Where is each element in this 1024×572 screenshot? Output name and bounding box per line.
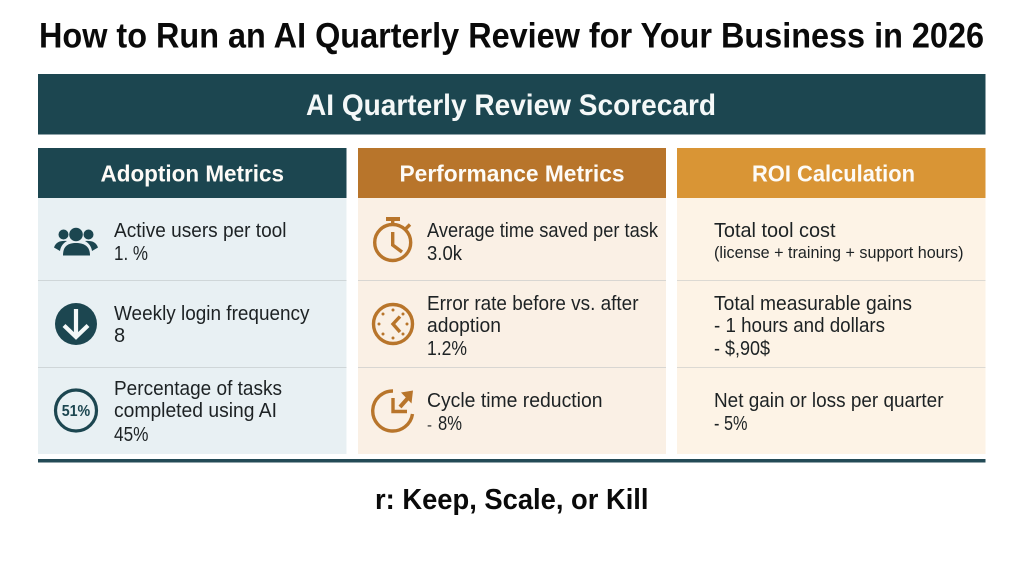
heading: roi calculation: ROI Calculation: [752, 160, 915, 186]
heading: performance metrics: [358, 148, 666, 198]
text: login frequency: [114, 303, 310, 347]
text: active users: Active users per tool: [114, 220, 286, 242]
text: cycle time: Cycle time reduction: [427, 390, 602, 412]
text: measurable gains: - $,90$: [714, 338, 770, 360]
text: cycle time: -: [427, 417, 432, 434]
text: total tool cost: [714, 220, 964, 262]
icon: users: [54, 228, 98, 256]
text: measurable gains: [714, 293, 912, 360]
text: error rate: Error rate before vs. after: [427, 293, 639, 315]
text: time saved: [427, 220, 659, 265]
panel: performance metrics: [358, 148, 666, 454]
text: net gain or loss: Net gain or loss per quarter: [714, 390, 944, 412]
banner: scorecard heading: [38, 74, 986, 134]
text: measurable gains: Total measurable gains: [714, 293, 912, 315]
text: net gain or loss: - 5%: [714, 413, 748, 435]
text: active users: 1. %: [114, 243, 148, 265]
text: tasks using ai: [114, 378, 282, 446]
panel: roi calculation: [677, 148, 986, 454]
text: error rate: [427, 293, 639, 360]
heading: adoption metrics: Adoption Metrics: [100, 160, 284, 186]
text: login frequency: 8: [114, 325, 125, 347]
text: measurable gains: - 1 hours and dollars: [714, 315, 885, 337]
text: cycle time: [427, 390, 602, 435]
text: login frequency: Weekly login frequency: [114, 303, 310, 325]
text: cycle time: 8%: [438, 413, 462, 435]
banner: scorecard heading: AI Quarterly Review Scorecard: [306, 89, 716, 122]
icon: clock: [374, 304, 412, 344]
text: error rate: adoption: [427, 315, 501, 337]
text: tasks using ai: 45%: [114, 424, 149, 446]
icon: stopwatch: [375, 219, 411, 260]
panel: adoption metrics: [38, 148, 346, 454]
text: time saved: 3.0k: [427, 243, 463, 265]
text: total tool cost: (license + training + support hours): [714, 243, 964, 262]
text: tasks using ai: completed using AI: [114, 400, 277, 422]
footer heading: r: Keep, Scale, or Kill: [375, 484, 648, 516]
text: time saved: Average time saved per task: [427, 220, 659, 242]
icon: down arrow circle: [55, 303, 97, 345]
heading: roi calculation: [677, 148, 986, 198]
icon: percent ring: [56, 390, 96, 431]
text: net gain or loss: [714, 390, 944, 435]
text: error rate: 1.2%: [427, 338, 467, 360]
icon: cycle time: [373, 390, 413, 431]
heading: performance metrics: Performance Metrics: [400, 160, 624, 186]
heading: adoption metrics: [38, 148, 346, 198]
text: active users: [114, 220, 286, 265]
text: tasks using ai: Percentage of tasks: [114, 378, 282, 400]
icon: percent ring: 51%: [62, 403, 90, 420]
text: total tool cost: Total tool cost: [714, 220, 836, 242]
divider rule: [38, 459, 986, 462]
